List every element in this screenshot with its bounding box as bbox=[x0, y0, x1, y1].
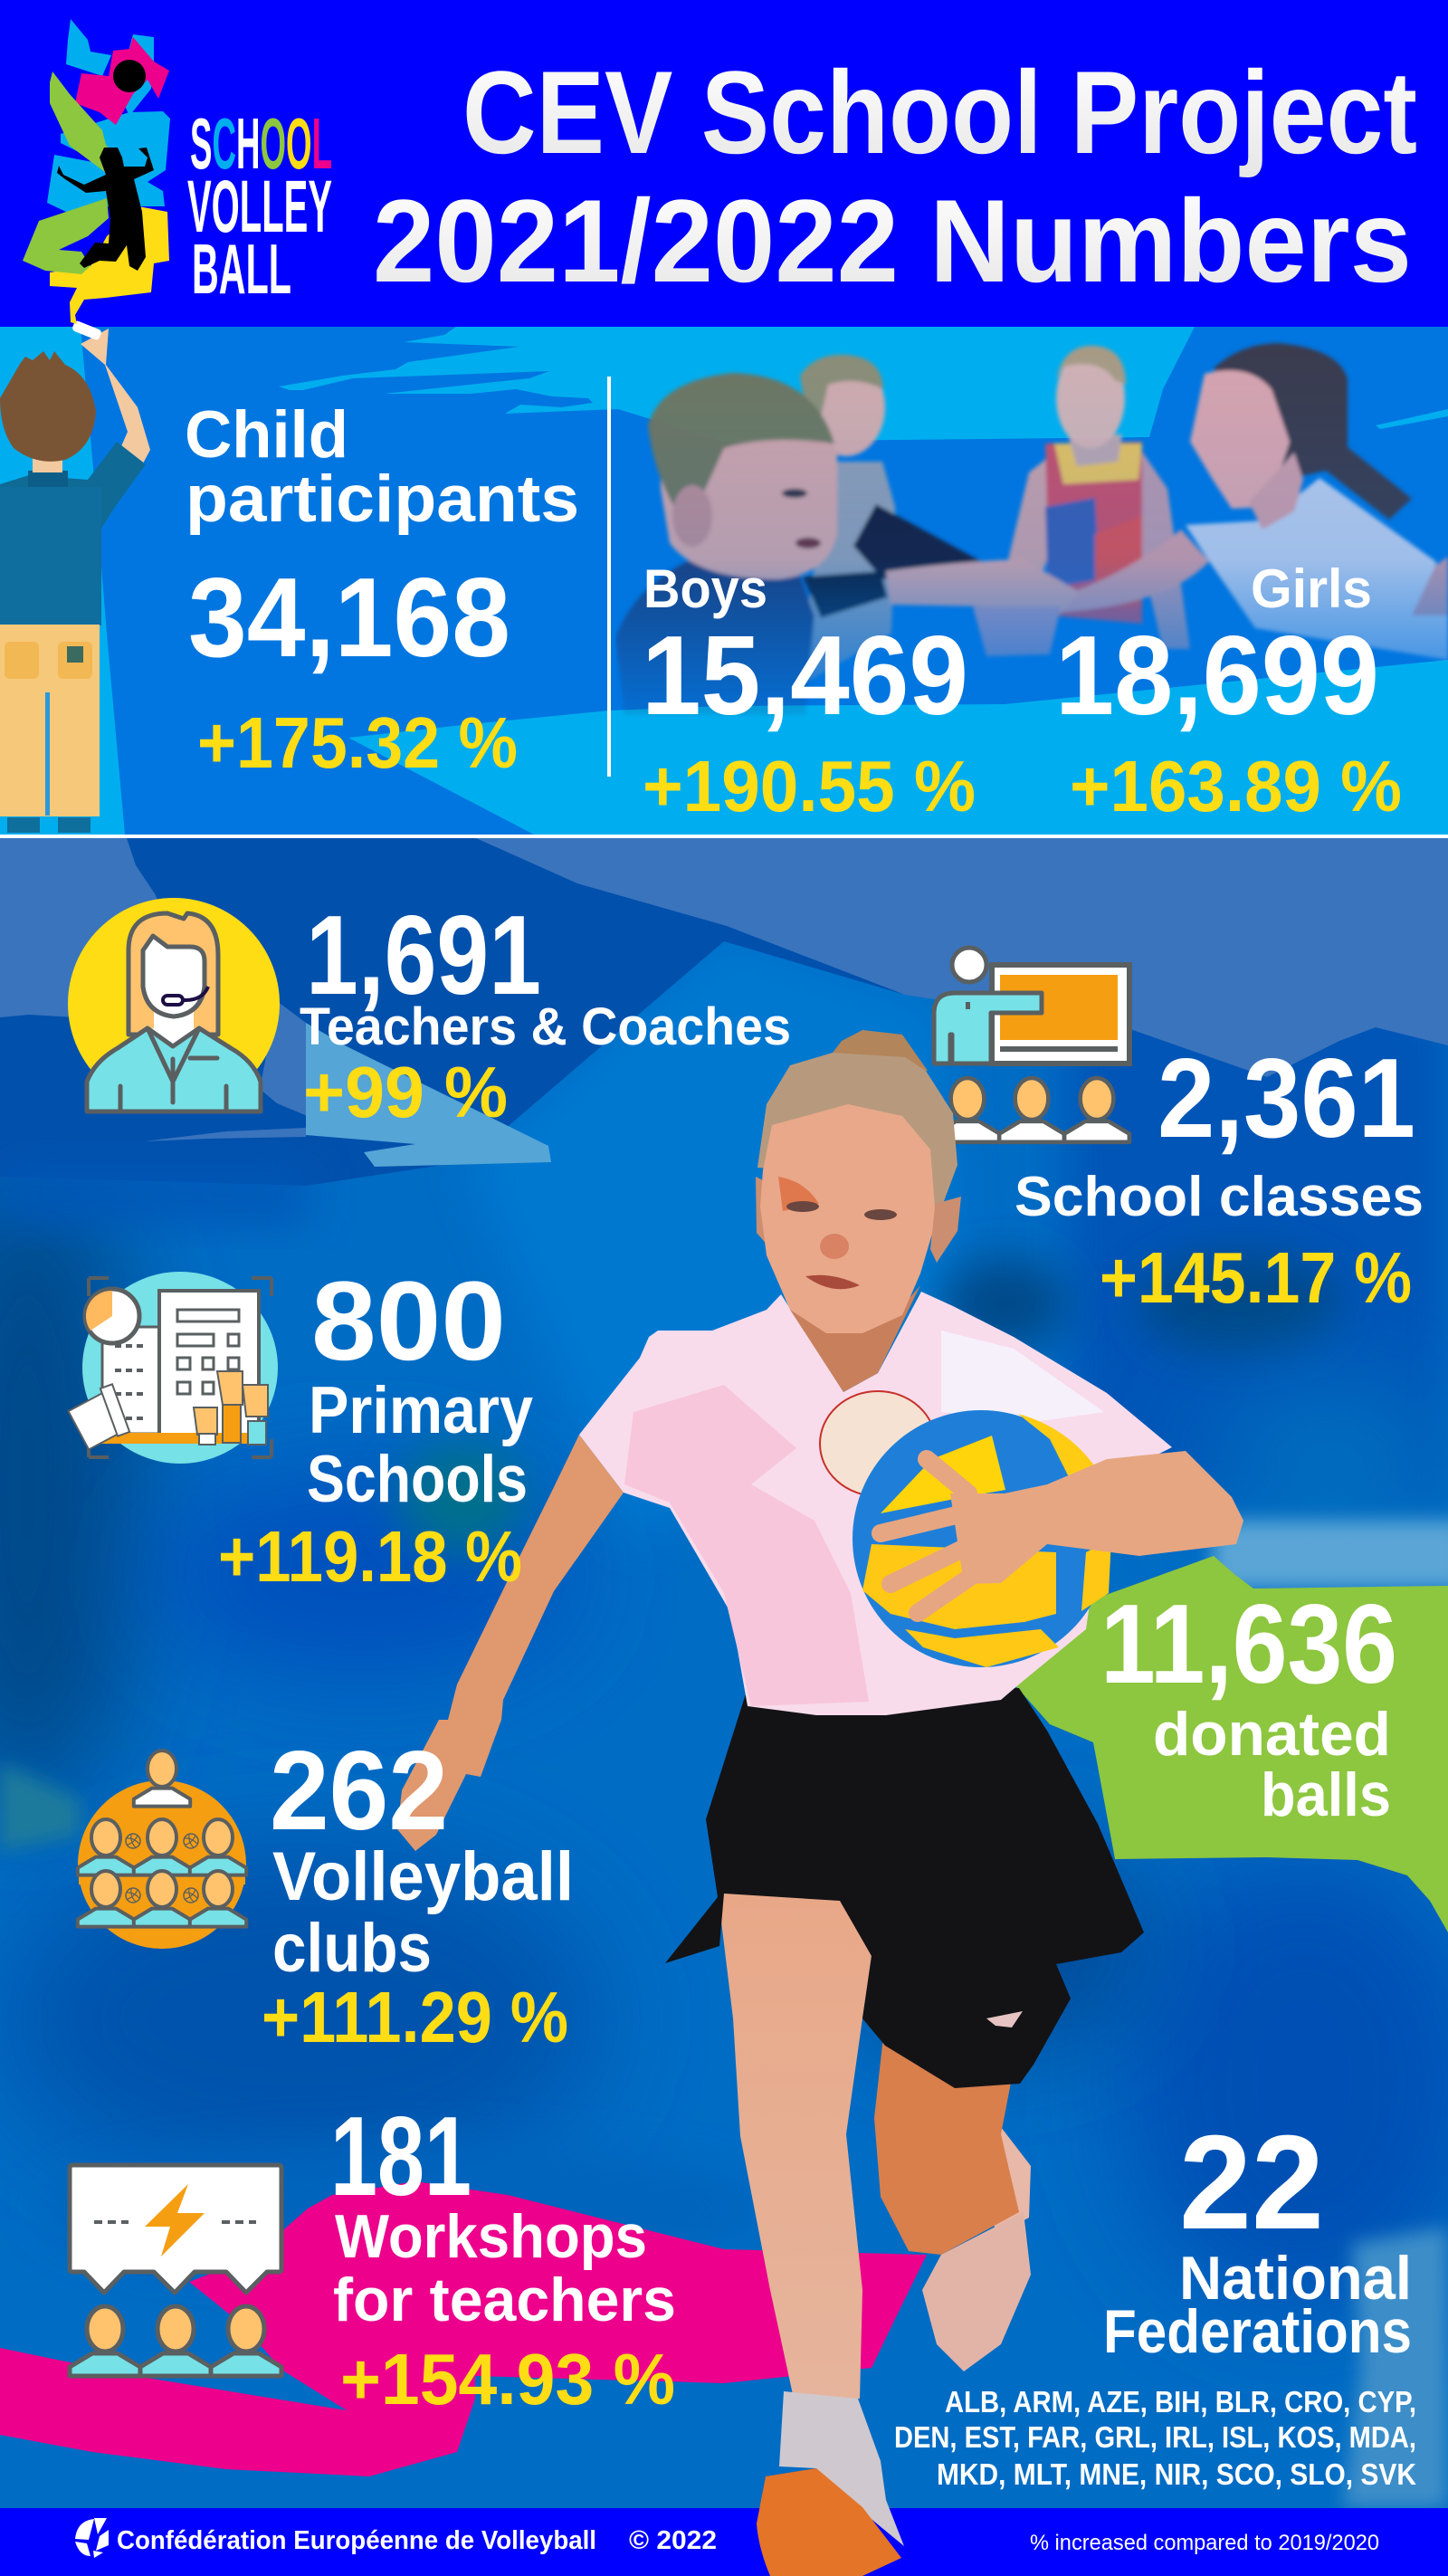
photo: first girl bbox=[1005, 346, 1190, 649]
text: VOLLEY bbox=[187, 166, 332, 248]
text: donated balls bbox=[1100, 1582, 1397, 1829]
footer: note: % increased compared to 2019/2020 bbox=[1030, 2531, 1379, 2555]
text: volleyball clubs bbox=[262, 1729, 574, 2057]
text: school classes: +145.17 % bbox=[1100, 1237, 1412, 1318]
title: 2021/2022 Numbers bbox=[373, 175, 1412, 307]
text: national federations bbox=[894, 2108, 1416, 2491]
panel: header band bbox=[0, 0, 1448, 327]
text: workshops for teachers: +154.93 % bbox=[340, 2339, 675, 2419]
stat: child participants: +175.32 % bbox=[197, 702, 518, 783]
panel: lower section background bbox=[0, 838, 1448, 2513]
text: primary schools: +119.18 % bbox=[218, 1516, 522, 1597]
text: teachers and coaches: 1,691 bbox=[306, 893, 541, 1018]
photo: left arm bbox=[397, 1435, 624, 1851]
text: teachers and coaches: +99 % bbox=[303, 1052, 508, 1132]
logo: School Volley Ball bbox=[23, 19, 332, 324]
title bbox=[373, 46, 1417, 307]
stat: boys: +190.55 % bbox=[643, 746, 976, 826]
logo: wordmark bbox=[187, 103, 332, 309]
photo: front leg bbox=[718, 1892, 872, 2399]
text: workshops for teachers bbox=[330, 2094, 676, 2419]
photo: back leg and shoe bbox=[874, 2037, 1031, 2371]
photo: girl running with ball bbox=[397, 1030, 1243, 2399]
stat: girls: +163.89 % bbox=[1070, 746, 1402, 826]
photo: front shoe over footer bbox=[757, 2391, 904, 2576]
text: school classes: School classes bbox=[1015, 1166, 1424, 1228]
text: donated balls: 11,636 bbox=[1100, 1582, 1397, 1707]
footer band bbox=[0, 2508, 1448, 2576]
photo: arm and hand on ball bbox=[881, 1451, 1243, 1613]
photo: shorts bbox=[665, 1688, 1144, 2088]
icon: workshop speech bubble and audience bbox=[70, 2165, 281, 2376]
text: donated balls: balls bbox=[1261, 1760, 1391, 1829]
text: primary schools bbox=[218, 1259, 533, 1597]
text: primary schools: 800 bbox=[311, 1259, 506, 1384]
text: workshops for teachers: 181 bbox=[330, 2094, 472, 2219]
footer: organisation name: Confédération Européenne de Volleyball bbox=[117, 2526, 596, 2555]
text: volleyball clubs: +111.29 % bbox=[262, 1977, 568, 2057]
photo: first boy bbox=[615, 373, 1080, 715]
stat: girls: Girls bbox=[1251, 558, 1372, 619]
illustration: boy painting bbox=[0, 320, 150, 833]
divider line in participants panel bbox=[607, 377, 611, 777]
stat: child participants: Child bbox=[185, 398, 348, 472]
white separator bbox=[0, 835, 1448, 838]
logo: wordmark: BALL bbox=[192, 229, 291, 309]
footer: CEV logo bbox=[75, 2518, 109, 2558]
text: volleyball clubs: 262 bbox=[270, 1729, 448, 1854]
photo: second boy bbox=[796, 355, 989, 688]
logo: wordmark: SCHOOL bbox=[190, 103, 332, 184]
text: school classes bbox=[1015, 1036, 1424, 1318]
brush: pink bbox=[0, 2181, 927, 2476]
text: workshops for teachers: Workshops bbox=[335, 2202, 647, 2271]
stat: boys bbox=[642, 558, 976, 826]
text: primary schools: Primary bbox=[309, 1374, 533, 1447]
photo: head bbox=[756, 1030, 961, 1392]
text: donated balls: donated bbox=[1153, 1700, 1391, 1769]
logo: ball bbox=[113, 60, 146, 92]
text: volleyball clubs: Volleyball bbox=[272, 1838, 574, 1915]
logo: brush strokes bbox=[23, 19, 170, 324]
text: national federations: National bbox=[1179, 2244, 1412, 2313]
stat: girls bbox=[1055, 558, 1402, 826]
stat: boys: Boys bbox=[643, 558, 767, 619]
icon: teacher with headset bbox=[68, 898, 280, 1111]
stat: girls: 18,699 bbox=[1055, 614, 1379, 739]
photo: second girl bbox=[1052, 343, 1448, 660]
stat: child participants bbox=[185, 398, 579, 783]
footer: copyright: © 2022 bbox=[629, 2526, 717, 2555]
text: teachers and coaches: Teachers & Coaches bbox=[300, 997, 791, 1056]
icon: primary school bbox=[69, 1272, 278, 1464]
photo: emblem bbox=[820, 1391, 936, 1496]
text: primary schools: Schools bbox=[307, 1443, 528, 1516]
text: volleyball clubs: clubs bbox=[272, 1910, 432, 1987]
text: national federations: Federations bbox=[1103, 2297, 1412, 2366]
photo: shirt bbox=[579, 1292, 1172, 1715]
icon: school classes bbox=[934, 948, 1129, 1142]
photo: children joining hands bbox=[615, 343, 1448, 715]
photo: volleyball bbox=[853, 1410, 1111, 1667]
brush: green bbox=[1014, 1556, 1448, 1932]
icon: volleyball clubs bbox=[78, 1751, 246, 1949]
text: national federations: 22 bbox=[1179, 2108, 1324, 2257]
text: teachers and coaches bbox=[300, 893, 791, 1132]
panel: participants background bbox=[0, 327, 1448, 835]
logo: jumping child silhouette bbox=[57, 148, 154, 271]
stat: child participants: 34,168 bbox=[188, 556, 510, 681]
text: school classes: 2,361 bbox=[1157, 1036, 1415, 1161]
stat: child participants: participants bbox=[186, 463, 579, 536]
text: workshops for teachers: for teachers bbox=[333, 2266, 676, 2334]
stat: boys: 15,469 bbox=[642, 614, 968, 739]
